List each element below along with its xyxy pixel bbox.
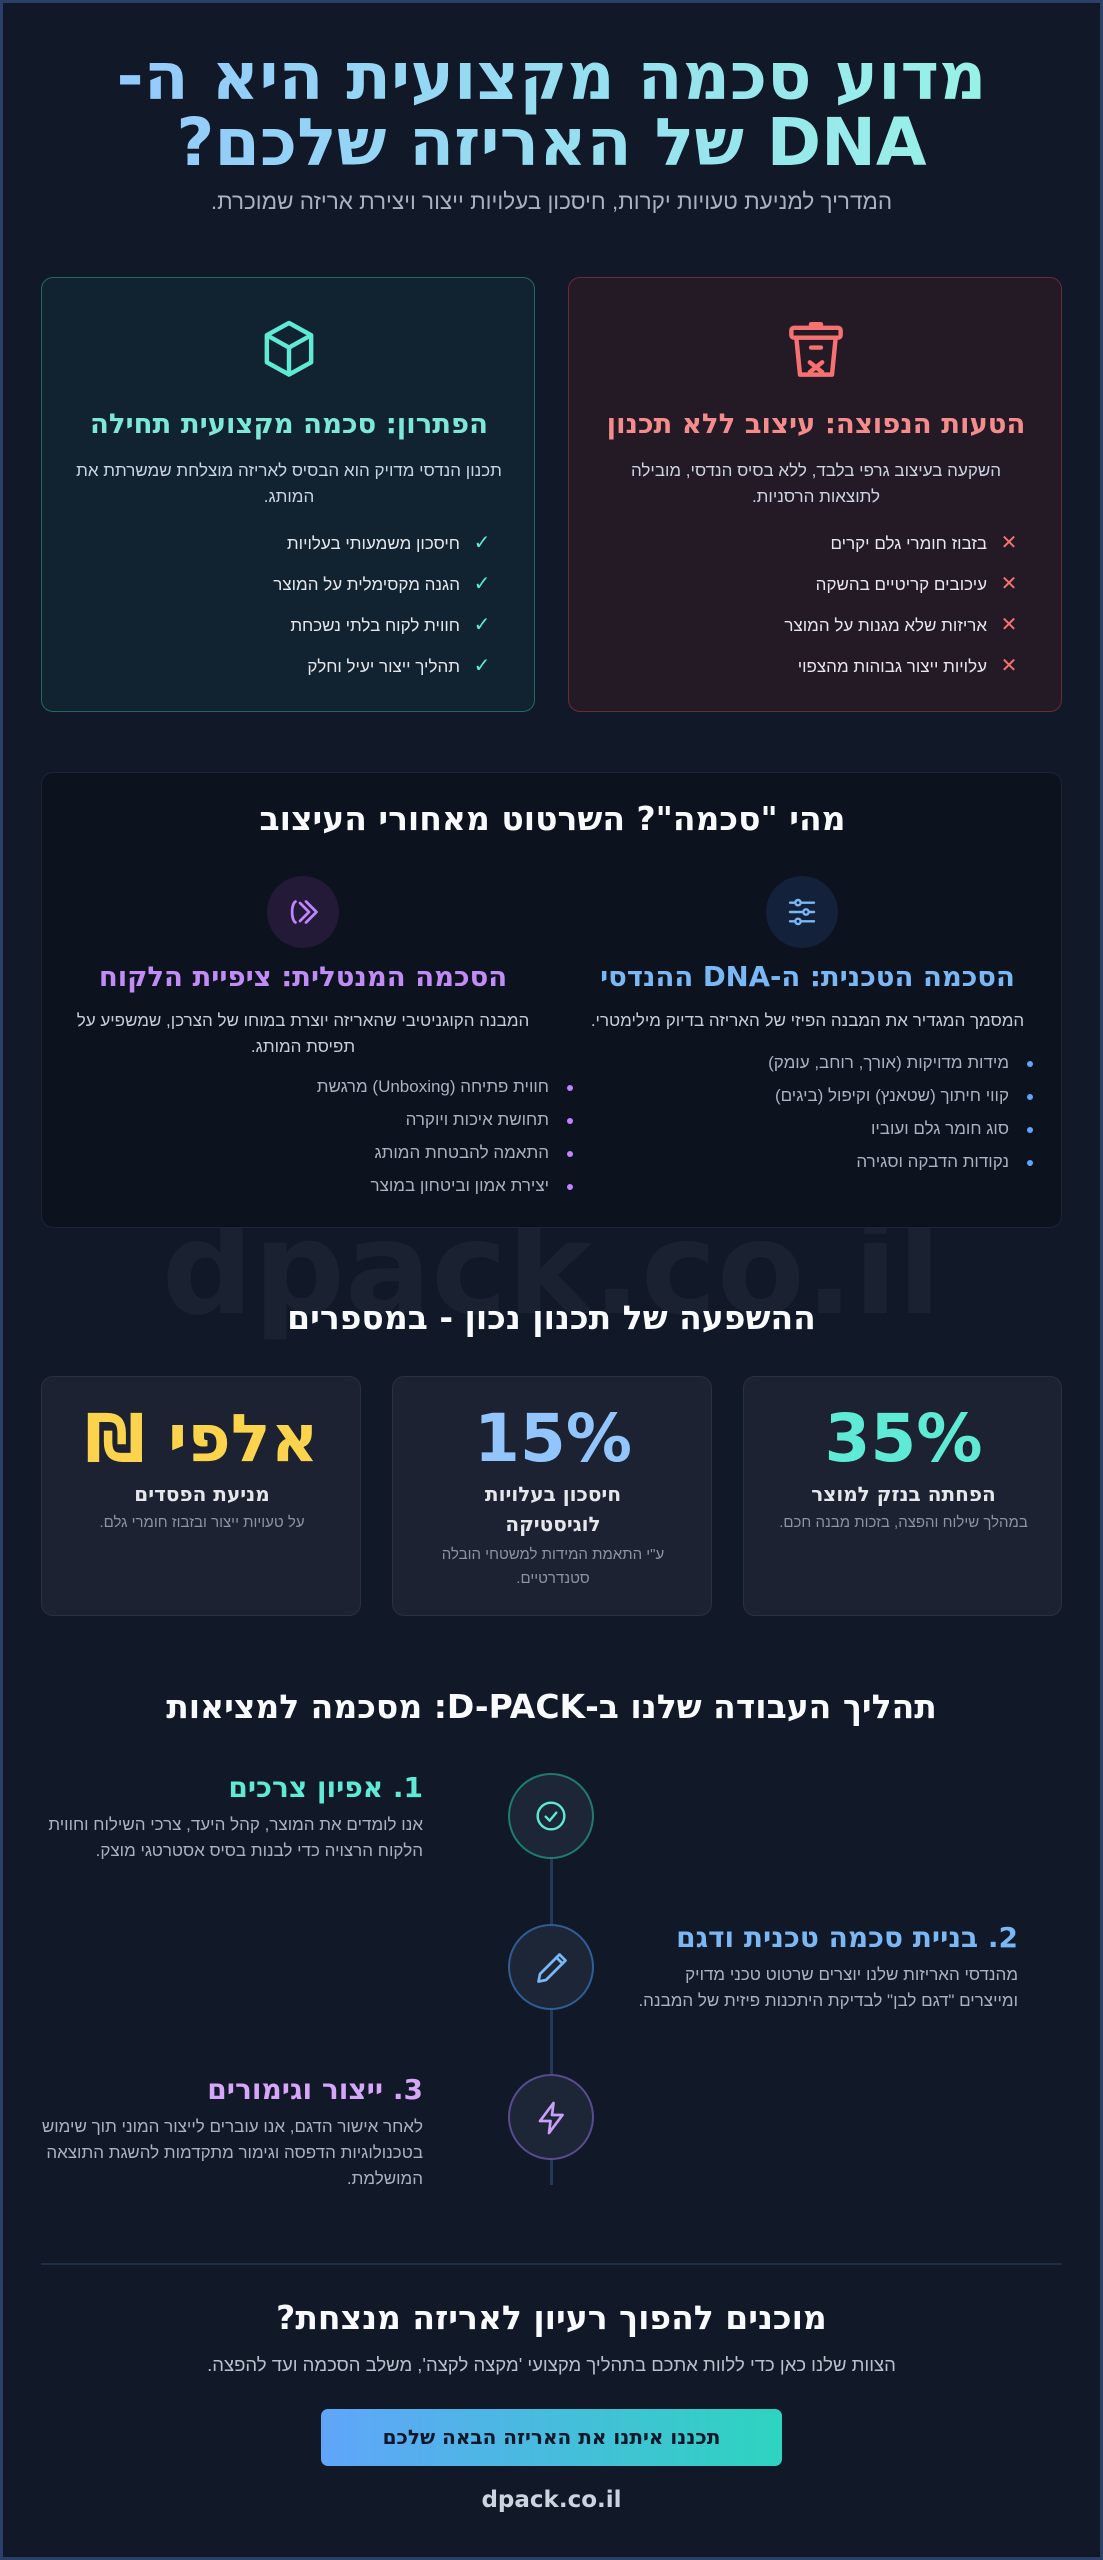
heading: הסכמה הטכנית: ה-DNA ההנדסי	[600, 961, 1015, 993]
stat: thousands: אלפי ₪	[85, 1400, 319, 1477]
heading: הפתרון: סכמה מקצועית תחילה	[90, 408, 488, 440]
icon: box	[264, 320, 314, 377]
subtitle: המדריך למניעת טעויות יקרות, חיסכון בעלויות ייצור ויצירת אריזה שמוכרת.	[211, 189, 892, 214]
list: הגנה מקסימלית על המוצר	[273, 575, 460, 594]
list: חווית לקוח בלתי נשכחת	[290, 616, 460, 635]
heading: מהי "סכמה"? השרטוט מאחורי העיצוב	[260, 799, 846, 838]
icon: check circle	[508, 1773, 594, 1859]
stat: thousands	[41, 1376, 361, 1616]
list	[317, 1077, 573, 1195]
step 3: 3. ייצור וגימורים	[207, 2073, 423, 2106]
list: תהליך ייצור יעיל וחלק	[307, 657, 460, 676]
stat: 15%: חיסכון בעלויות לוגיסטיקה	[485, 1482, 621, 1536]
title: DNA של האריזה שלכם?	[176, 105, 927, 181]
step 1: 1. אפיון צרכים	[228, 1771, 423, 1804]
list: עיכובים קריטיים בהשקה	[816, 575, 987, 594]
CTA button: תכננו איתנו את האריזה הבאה שלכם	[383, 2425, 720, 2449]
CTA heading: מוכנים להפוך רעיון לאריזה מנצחת?	[276, 2298, 827, 2337]
text: המבנה הקוגניטיבי שהאריזה יוצרת במוחו של הצרכן, שמשפיע על תפיסת המותג.	[77, 1011, 529, 1056]
list: מידות מדויקות (אורך, רוחב, עומק)	[768, 1053, 1009, 1072]
step 2: ומייצרים "דגם לבן" לבדיקת היתכנות פיזית של המבנה.	[638, 1991, 1018, 2010]
list: ✕	[1001, 655, 1017, 677]
panel: what is schema	[41, 772, 1062, 1228]
panel: solution	[41, 277, 535, 712]
list: ✓	[474, 573, 490, 595]
list: ✓	[474, 655, 490, 677]
list: ✓	[474, 532, 490, 554]
icon: sound	[267, 876, 339, 948]
stat: 15%: ע"י התאמת המידות למשטחי הובלה סטנדרטיים.	[442, 1546, 664, 1587]
heading: process: תהליך העבודה שלנו ב-D-PACK: מסכמה למציאות	[166, 1687, 937, 1726]
heading: הטעות הנפוצה: עיצוב ללא תכנון	[607, 408, 1025, 440]
step 1: אנו לומדים את המוצר, קהל היעד, צרכי השילוח וחווית הלקוח הרצויה כדי לבנות בסיס אסטרטגי מוצק.	[48, 1815, 423, 1860]
step 2: 2. בניית סכמה טכנית ודגם	[676, 1921, 1018, 1954]
column: technical	[591, 876, 1033, 1171]
list: נקודות הדבקה וסגירה	[856, 1152, 1009, 1171]
step 1	[48, 1771, 423, 1860]
list: ✕	[1001, 573, 1017, 595]
list: חווית פתיחה (Unboxing) מרגשת	[317, 1077, 549, 1096]
list: סוג חומר גלם ועוביו	[871, 1119, 1009, 1138]
stat: 15%	[392, 1376, 712, 1616]
list: חיסכון משמעותי בעלויות	[287, 534, 460, 553]
icon: sliders	[766, 876, 838, 948]
heading: הסכמה המנטלית: ציפיית הלקוח	[99, 961, 507, 993]
CTA text: הצוות שלנו כאן כדי ללוות אתכם בתהליך מקצועי 'מקצה לקצה', משלב הסכמה ועד להפצה.	[207, 2354, 896, 2375]
stat: 35%: 35%	[824, 1400, 982, 1477]
list: קווי חיתוך (שטאנץ) וקיפול (ביגים)	[775, 1086, 1009, 1105]
watermark: dpack.co.il	[162, 1195, 941, 1344]
list: תחושת איכות ויוקרה	[406, 1110, 549, 1129]
stat: 15%: 15%	[474, 1400, 632, 1477]
stat: 35%: הפחתה בנזק למוצר	[811, 1482, 996, 1506]
stat: 35%	[743, 1376, 1062, 1616]
CTA button	[321, 2409, 782, 2466]
list: ✕	[1001, 532, 1017, 554]
heading: stats: ההשפעה של תכנון נכון - במספרים	[287, 1298, 816, 1337]
column: mental	[77, 876, 573, 1195]
panel: mistake	[568, 277, 1062, 712]
list: ✓	[474, 614, 490, 636]
step 3: לאחר אישור הדגם, אנו עוברים לייצור המוני תוך שימוש בטכנולוגיות הדפסה וגימור מתקדמות להשגת התוצאה המושלמת.	[42, 2117, 423, 2188]
stat: thousands: מניעת הפסדים	[134, 1482, 270, 1506]
stat: thousands: על טעויות ייצור ובזבוז חומרי גלם.	[99, 1514, 305, 1531]
step 2: מהנדסי האריזות שלנו יוצרים שרטוט טכני מדויק	[685, 1965, 1018, 1984]
icon: bolt	[508, 2074, 594, 2160]
step 3	[42, 2073, 423, 2188]
list: התאמה להבטחת המותג	[374, 1143, 549, 1162]
list: עלויות ייצור גבוהות מהצפוי	[798, 657, 987, 676]
stat: 35%: במהלך שילוח והפצה, בזכות מבנה חכם.	[779, 1514, 1028, 1531]
text: המסמך המגדיר את המבנה הפיזי של האריזה בדיוק מילימטרי.	[591, 1011, 1024, 1030]
icon: trash	[789, 322, 843, 377]
list	[768, 1053, 1033, 1171]
list	[273, 532, 490, 677]
text: השקעה בעיצוב גרפי בלבד, ללא בסיס הנדסי, מובילה לתוצאות הרסניות.	[631, 461, 1001, 506]
title	[20, 44, 1083, 176]
list: יצירת אמון וביטחון במוצר	[370, 1176, 549, 1195]
list: אריזות שלא מגנות על המוצר	[784, 616, 987, 635]
list	[784, 532, 1017, 677]
text: תכנון הנדסי מדויק הוא הבסיס לאריזה מוצלחת שמשרתת את המותג.	[76, 461, 502, 506]
title: מדוע סכמה מקצועית היא ה-	[117, 39, 986, 115]
icon: pen	[508, 1924, 594, 2010]
timeline line	[550, 1779, 553, 2185]
list: ✕	[1001, 614, 1017, 636]
list: בזבוז חומרי גלם יקרים	[830, 534, 987, 553]
footer url: dpack.co.il	[481, 2487, 622, 2513]
step 2	[638, 1921, 1018, 2010]
